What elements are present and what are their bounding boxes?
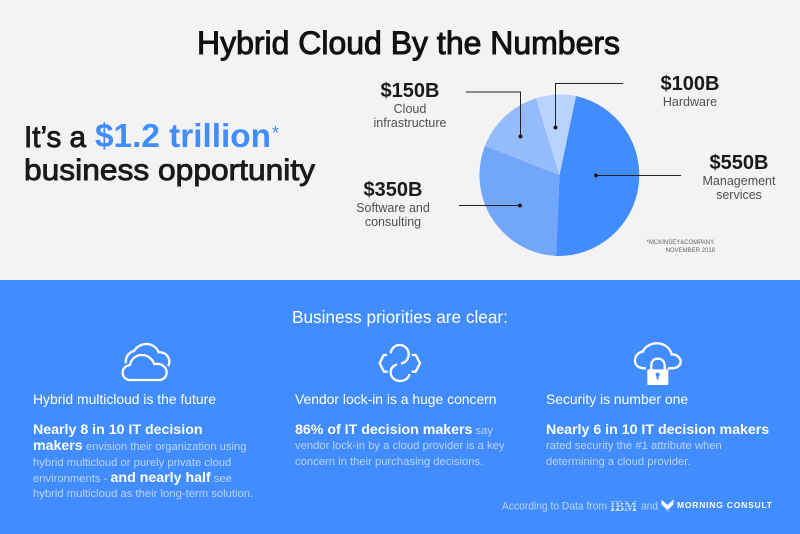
label: $150B cloud infrastructure: $150B xyxy=(381,80,439,102)
column body: 86% of IT decision makers say xyxy=(295,422,493,438)
column body: rated security the #1 attribute when xyxy=(546,440,722,452)
title: Hybrid Cloud By the Numbers xyxy=(197,25,620,61)
column heading: Security is number one xyxy=(546,391,688,407)
leader line: hardware xyxy=(554,84,623,129)
pie chart with leader lines xyxy=(459,83,681,256)
column heading: Hybrid multicloud is the future xyxy=(33,391,216,407)
column: security xyxy=(546,391,769,468)
label: $100B hardware: $100B xyxy=(661,73,719,95)
heading text: title and headline xyxy=(24,25,620,187)
icon: chain link xyxy=(378,344,422,382)
label: $550B management services: $550B xyxy=(710,152,768,174)
column body: hybrid multicloud as their long-term solution. xyxy=(33,488,253,500)
label: $350B software and consulting: consulting xyxy=(365,215,421,229)
column body: hybrid multicloud or purely private cloud xyxy=(33,457,231,469)
label: $100B hardware: Hardware xyxy=(663,95,717,109)
label: $150B cloud infrastructure xyxy=(374,80,446,130)
label: $550B management services xyxy=(703,152,776,202)
bottom panel xyxy=(0,280,800,534)
column body: makers envision their organization using xyxy=(33,438,247,454)
slice: cloud infrastructure xyxy=(485,98,560,175)
column body: Nearly 6 in 10 IT decision makers xyxy=(546,422,769,438)
top panel xyxy=(0,0,800,280)
label: $550B management services: services xyxy=(716,188,762,202)
slice: management services xyxy=(556,96,639,256)
source note: *MCKINSEY&COMPANY. xyxy=(647,240,715,246)
column: hybrid multicloud xyxy=(33,391,253,500)
column body xyxy=(295,422,504,468)
icon: clouds xyxy=(122,342,170,382)
source note xyxy=(646,240,715,254)
label: $350B software and consulting xyxy=(356,179,430,229)
column body: concern in their purchasing decisions. xyxy=(295,456,483,468)
asterisk: * xyxy=(272,123,279,143)
label: $100B hardware xyxy=(660,73,719,109)
column body: environments - and nearly half see xyxy=(33,470,232,486)
label: $150B cloud infrastructure: Cloud xyxy=(394,102,426,116)
and: and xyxy=(641,500,658,512)
label: $350B software and consulting: $350B xyxy=(364,179,422,201)
column body: vendor lock-in by a cloud provider is a key xyxy=(295,440,504,452)
wordmark: morning consult: MORNING CONSULT xyxy=(677,500,773,510)
section heading: Business priorities are clear: xyxy=(292,307,508,327)
icon: cloud with padlock xyxy=(634,342,682,385)
column: vendor lock-in xyxy=(295,391,504,468)
label: $350B software and consulting: Software and xyxy=(356,201,430,215)
headline amount: $1.2 trillion xyxy=(95,117,271,154)
column body xyxy=(546,422,769,468)
slice: hardware xyxy=(536,95,576,175)
headline line 1: It’s a xyxy=(24,121,86,154)
logo: morning consult mark xyxy=(662,500,674,512)
column body: determining a cloud provider. xyxy=(546,456,690,468)
label: $150B cloud infrastructure: infrastructure xyxy=(374,116,446,130)
logo: IBM: IBM xyxy=(610,499,637,515)
leader line: software xyxy=(459,204,522,207)
source note: NOVEMBER 2018 xyxy=(666,248,715,254)
column body: Nearly 8 in 10 IT decision xyxy=(33,422,203,438)
attribution xyxy=(502,499,773,515)
attribution text: According to Data from xyxy=(502,500,607,512)
headline line 2: business opportunity xyxy=(24,154,315,187)
column heading: Vendor lock-in is a huge concern xyxy=(295,391,497,407)
label: $550B management services: Management xyxy=(703,174,775,188)
column body xyxy=(33,422,253,500)
leader line: cloud infrastructure xyxy=(466,92,522,138)
slice: software and consulting xyxy=(479,146,560,256)
leader line: management services xyxy=(594,174,681,177)
